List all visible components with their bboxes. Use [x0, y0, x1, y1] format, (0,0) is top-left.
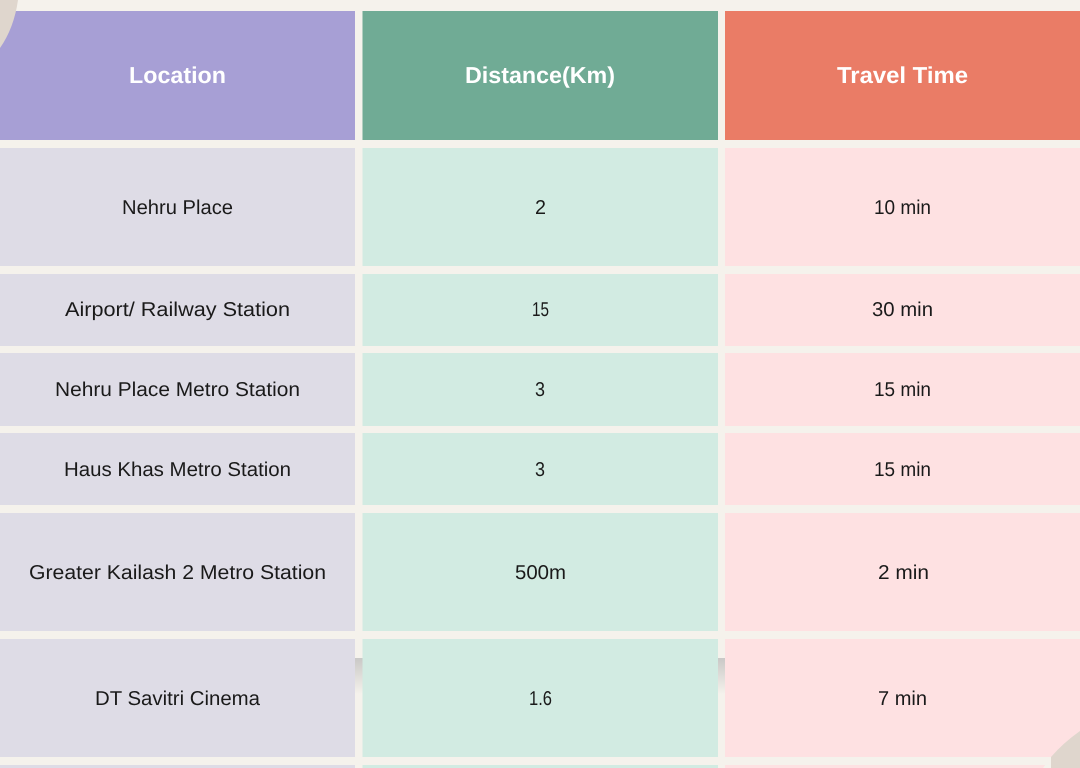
row: Nehru Place: 10 min — [874, 197, 931, 219]
gutter shadow: right — [718, 658, 725, 694]
header: Travel Time: Travel Time — [837, 62, 968, 88]
row: DT Savitri Cinema — [0, 639, 1080, 757]
header: Location: Location — [129, 62, 226, 88]
row: Greater Kailash 2 Metro Station — [0, 513, 1080, 631]
header row — [0, 11, 1080, 140]
row: Haus Khas Metro Station — [0, 433, 1080, 505]
row: DT Savitri Cinema: 1.6 — [529, 688, 552, 710]
row: Airport / Railway Station: 15 — [532, 299, 549, 321]
row: Nehru Place Metro Station: Nehru Place Metro Station — [55, 379, 300, 401]
header: Distance: Distance(Km) — [465, 62, 615, 88]
row: Nehru Place Metro Station — [0, 353, 1080, 426]
row: Haus Khas Metro Station: 3 — [535, 459, 545, 481]
header: Location — [0, 11, 355, 140]
row: Haus Khas Metro Station: 15 min — [874, 459, 931, 481]
row: Airport / Railway Station — [0, 274, 1080, 346]
header: Travel Time — [725, 11, 1080, 140]
decoration: top-left beige circle — [0, 0, 18, 48]
row: Greater Kailash 2 Metro Station: Greater Kailash 2 Metro Station — [29, 562, 326, 584]
row: Nehru Place: 2 — [535, 197, 546, 219]
row: Nehru Place Metro Station: 3 — [535, 379, 545, 401]
row: Greater Kailash 2 Metro Station: 500m — [515, 562, 566, 584]
row: Nehru Place: Nehru Place — [122, 197, 233, 219]
row: Nehru Place — [0, 148, 1080, 266]
row: Airport / Railway Station: 30 min — [872, 299, 933, 321]
gutter shadow: left — [355, 658, 363, 694]
row: Greater Kailash 2 Metro Station: 2 min — [878, 562, 929, 584]
decoration: bottom-right beige circle — [1043, 731, 1080, 768]
row: next row partially visible — [0, 765, 1080, 768]
row: Haus Khas Metro Station: Haus Khas Metro Station — [64, 459, 291, 481]
header: Distance — [362, 11, 718, 140]
row: DT Savitri Cinema: 7 min — [878, 688, 927, 710]
row: Airport / Railway Station: Airport/ Railway Station — [65, 299, 290, 321]
row: Nehru Place Metro Station: 15 min — [874, 379, 931, 401]
row: DT Savitri Cinema: DT Savitri Cinema — [95, 688, 261, 710]
